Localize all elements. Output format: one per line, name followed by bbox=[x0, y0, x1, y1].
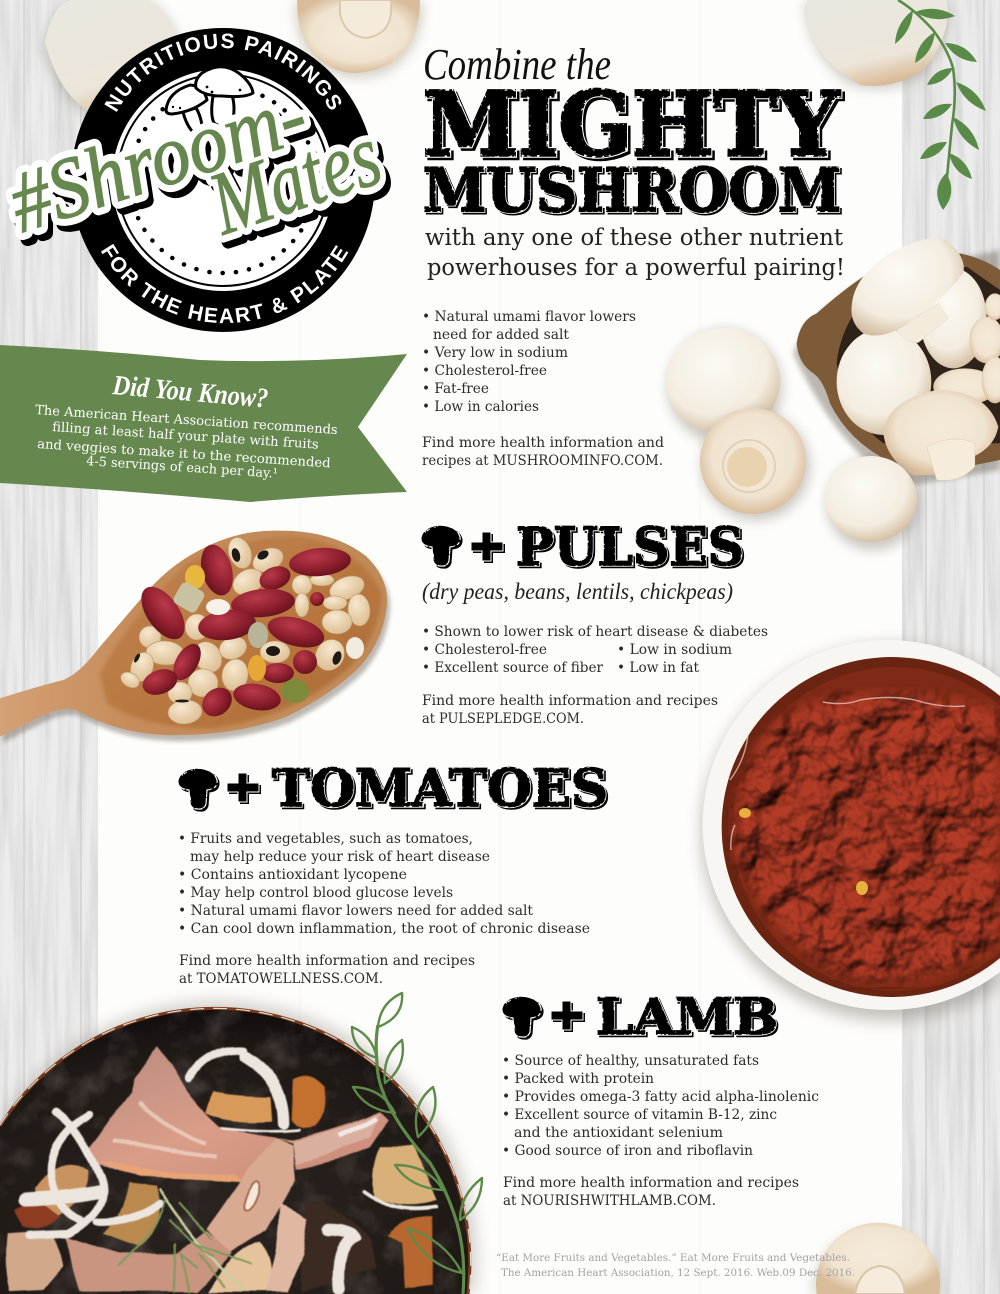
wordmark shadow: Mates bbox=[201, 112, 397, 260]
footnote: “Eat More Fruits and Vegetables.” Eat More Fruits and Vegetables. bbox=[496, 1252, 850, 1264]
bullets: pulses: • Shown to lower risk of heart disease & diabetes bbox=[422, 624, 768, 640]
mushroom: top left whole bbox=[42, 0, 182, 126]
bullets: tomatoes: • Contains antioxidant lycopene bbox=[178, 867, 407, 883]
link text: pulsepledge: at PULSEPLEDGE.COM. bbox=[422, 711, 584, 727]
bean eyes bbox=[133, 547, 343, 702]
mushroom pieces bbox=[207, 1092, 272, 1122]
bowl mushroom: middle bbox=[837, 328, 931, 435]
bullets: mushroom benefits: • Low in calories bbox=[422, 399, 539, 415]
bullets: pulses: • Low in sodium bbox=[617, 642, 732, 658]
bowl mushroom: right pieces bbox=[933, 293, 1000, 405]
bowl mushroom: front bbox=[883, 390, 998, 475]
bullets: pulses: • Low in fat bbox=[617, 660, 700, 676]
lamb title: LAMB bbox=[596, 987, 778, 1046]
link text: mushroominfo: recipes at MUSHROOMINFO.COM. bbox=[422, 453, 663, 469]
icon: mushroom bbox=[178, 768, 219, 811]
wordmark: #Shroom- bbox=[0, 65, 318, 251]
bullets: lamb: • Source of healthy, unsaturated fats bbox=[502, 1053, 759, 1069]
onion slices bbox=[27, 1050, 437, 1290]
bowl mushroom: top cap bbox=[897, 303, 948, 343]
tomatoes title: TOMATOES bbox=[272, 759, 608, 819]
tomatoes title: TOMATOES bbox=[272, 759, 608, 819]
photo: bowl of mushrooms bbox=[793, 238, 1000, 487]
badge text bottom: FOR THE HEART & PLATE bbox=[101, 244, 348, 324]
bowl rim bbox=[703, 640, 1000, 1010]
spoon bbox=[0, 531, 387, 737]
heading: tomatoes bbox=[178, 759, 610, 821]
bullets: tomatoes bbox=[178, 831, 590, 937]
heading: Combine the: Combine the bbox=[423, 40, 611, 89]
bullets: tomatoes: • Can cool down inflammation, the root of chronic disease bbox=[178, 921, 590, 937]
plus sign bbox=[471, 532, 505, 563]
banner heading: Did You Know? bbox=[111, 370, 269, 415]
link text: pulsepledge: Find more health information and recipes bbox=[422, 693, 718, 709]
heading: pulses bbox=[421, 517, 746, 580]
photo: bottom mushroom bbox=[812, 1223, 942, 1294]
bullets: tomatoes: • May help control blood glucose levels bbox=[178, 885, 453, 901]
icon: two mushrooms bbox=[166, 67, 253, 131]
banner body: The American Heart Association recommends bbox=[35, 403, 338, 438]
badge text top: NUTRITIOUS PAIRINGS bbox=[104, 34, 342, 112]
logo: Shroom-Mates badge bbox=[0, 28, 397, 332]
subheading: pulses: (dry peas, beans, lentils, chickpeas) bbox=[422, 579, 733, 604]
bullets: mushroom benefits: need for added salt bbox=[433, 327, 570, 343]
sprig: outline leaves over pan bbox=[352, 993, 482, 1294]
link text: tomatowellness bbox=[179, 953, 475, 987]
sauce base bbox=[722, 657, 1000, 997]
rosemary bbox=[118, 1190, 252, 1292]
second chop bbox=[63, 1230, 233, 1292]
mushroom: top right bbox=[805, 0, 949, 88]
rib bone bbox=[207, 1138, 296, 1253]
bullets: mushroom benefits: • Cholesterol-free bbox=[422, 363, 547, 379]
title: Mighty Mushroom bbox=[423, 72, 843, 228]
banner body: filling at least half your plate with fruits bbox=[52, 420, 319, 453]
bullets: pulses: • Excellent source of fiber bbox=[422, 660, 603, 676]
sauce highlights bbox=[730, 698, 965, 850]
bullets: lamb bbox=[502, 1053, 819, 1159]
banner: Did You Know bbox=[0, 345, 407, 502]
bullets: tomatoes: • Fruits and vegetables, such as tomatoes, bbox=[178, 831, 473, 847]
sprig: top right leaves bbox=[895, 0, 986, 210]
wordmark: Mates bbox=[196, 106, 392, 254]
lamb chop bbox=[85, 1047, 388, 1182]
sauce lumps bbox=[734, 694, 1000, 981]
bullets: lamb: • Packed with protein bbox=[502, 1071, 654, 1087]
photo: wooden spoon with beans bbox=[0, 531, 390, 743]
link text: nourishwithlamb: Find more health information and recipes bbox=[503, 1175, 799, 1191]
subtitle: powerhouses for a powerful pairing! bbox=[427, 255, 845, 281]
pulses title: PULSES bbox=[516, 517, 744, 578]
beans: yellow, green and pale bbox=[172, 565, 364, 703]
lamb title: LAMB bbox=[596, 987, 778, 1046]
title: Mighty Mushroom: MUSHROOM bbox=[423, 156, 841, 226]
wordmark outline: Mates bbox=[196, 106, 392, 254]
pulses title: PULSES bbox=[518, 519, 746, 580]
link text: mushroominfo: Find more health information and bbox=[422, 435, 664, 451]
title: Mighty Mushroom: MIGHTY bbox=[426, 75, 843, 179]
link text: mushroominfo bbox=[422, 435, 664, 469]
banner body bbox=[35, 403, 338, 482]
title: Mighty Mushroom: MIGHTY bbox=[423, 72, 840, 176]
bullets: pulses: • Cholesterol-free bbox=[422, 642, 547, 658]
bullets: tomatoes: • Natural umami flavor lowers need for added salt bbox=[178, 903, 534, 919]
bullets: pulses bbox=[422, 624, 768, 676]
footnote bbox=[496, 1252, 855, 1279]
wordmark outline: #Shroom- bbox=[0, 65, 318, 251]
bullets: mushroom benefits: • Natural umami flavor lowers bbox=[422, 309, 636, 325]
pan bbox=[0, 1008, 470, 1294]
beans: cream bbox=[118, 534, 371, 725]
wordmark shadow: #Shroom- bbox=[2, 71, 323, 257]
subtitle bbox=[425, 225, 845, 281]
title: Mighty Mushroom: MIGHTY bbox=[423, 72, 840, 176]
tomatoes title: TOMATOES bbox=[274, 761, 610, 821]
mushroom: top centre underside bbox=[295, 0, 423, 78]
icon: mushroom bbox=[421, 525, 462, 568]
plus sign bbox=[227, 773, 261, 804]
bowl shadow bbox=[793, 250, 1000, 487]
icon: mushroom bbox=[502, 996, 543, 1039]
photo: loose mushrooms bbox=[666, 328, 919, 550]
lamb title: LAMB bbox=[598, 989, 780, 1048]
link text: tomatowellness: at TOMATOWELLNESS.COM. bbox=[179, 971, 383, 987]
banner body: 4-5 servings of each per day.¹ bbox=[86, 454, 278, 482]
bowl bbox=[797, 253, 1000, 465]
subtitle: with any one of these other nutrient bbox=[425, 225, 844, 251]
footnote: The American Heart Association, 12 Sept. 2016. Web.09 Dec. 2016. bbox=[501, 1267, 855, 1279]
bullets: lamb: • Provides omega-3 fatty acid alpha-linolenic bbox=[502, 1089, 819, 1105]
heading: lamb bbox=[502, 987, 780, 1048]
link text: nourishwithlamb: at NOURISHWITHLAMB.COM. bbox=[503, 1193, 716, 1209]
bullets: mushroom benefits bbox=[422, 309, 636, 415]
link text: pulsepledge bbox=[422, 693, 718, 727]
bullets: lamb: • Good source of iron and riboflavin bbox=[502, 1143, 753, 1159]
bullets: mushroom benefits: • Very low in sodium bbox=[422, 345, 568, 361]
link text: tomatowellness: Find more health information and recipes bbox=[179, 953, 475, 969]
seeds bbox=[739, 808, 751, 818]
plus sign bbox=[551, 1001, 585, 1032]
bullets: mushroom benefits: • Fat-free bbox=[422, 381, 489, 397]
photo: pan of lamb chops bbox=[0, 1001, 476, 1294]
bullets: lamb: and the antioxidant selenium bbox=[514, 1125, 723, 1141]
badge ring bbox=[71, 28, 375, 332]
banner body: and veggies to make it to the recommended bbox=[37, 437, 331, 471]
bullets: tomatoes: may help reduce your risk of heart disease bbox=[190, 849, 490, 865]
photo: bowl of tomato sauce bbox=[702, 640, 1000, 1020]
bullets: lamb: • Excellent source of vitamin B-12, zinc bbox=[502, 1107, 777, 1123]
title: Mighty Mushroom: MUSHROOM bbox=[423, 156, 841, 226]
title: Mighty Mushroom: MUSHROOM bbox=[425, 158, 843, 228]
beans: red kidney bbox=[133, 541, 352, 722]
pulses title: PULSES bbox=[516, 517, 744, 578]
bowl mushroom: back bbox=[920, 268, 987, 368]
link text: nourishwithlamb bbox=[503, 1175, 799, 1209]
